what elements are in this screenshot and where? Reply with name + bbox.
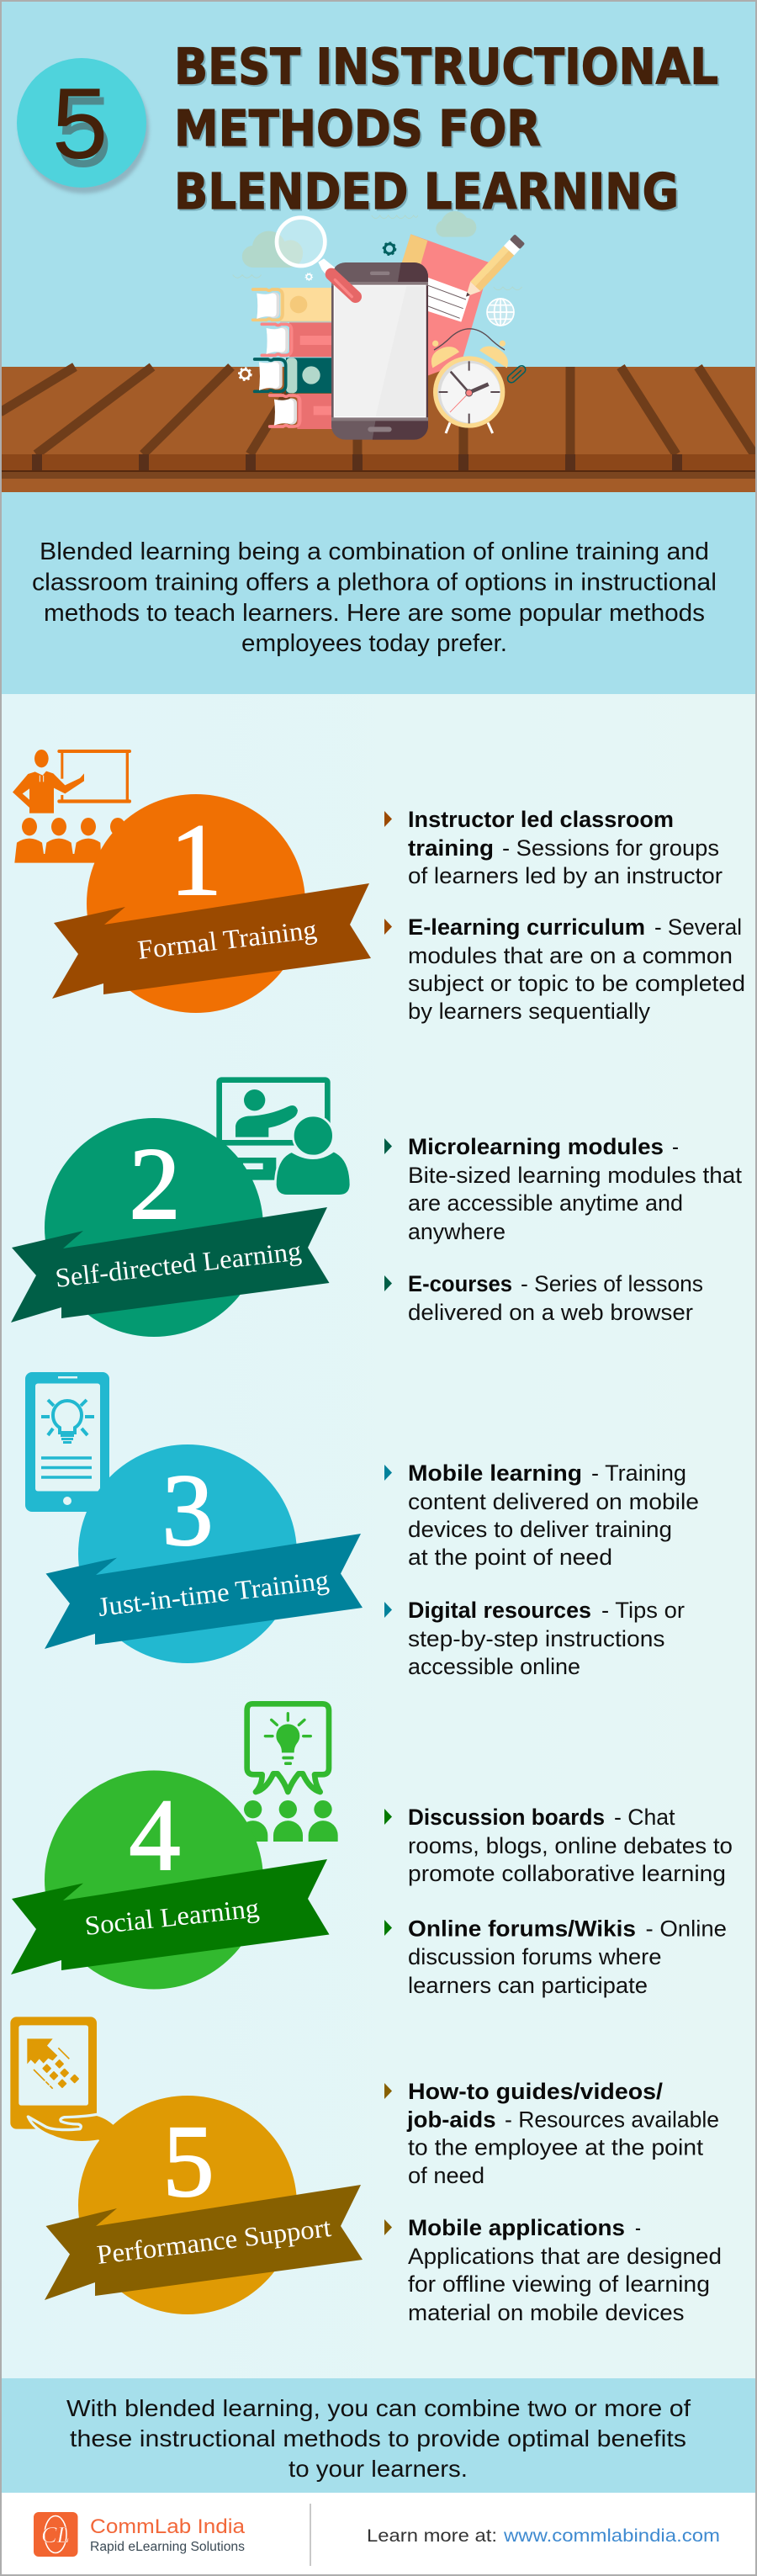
panel: closing statement: to your learners. [289,2456,468,2482]
bullets: formal training: - Sessions for groups [502,835,719,861]
panel: footer [0,2493,757,2576]
icon: alarm clock [431,329,508,433]
section 2: self-directed learning [11,1080,743,1337]
bullets: formal training [384,807,745,1024]
logo text: CommLab India [90,2515,246,2538]
bullets: self-directed learning: are accessible anytime and [408,1190,683,1216]
bullets: self-directed learning [384,1134,743,1325]
ribbon: just-in-time training [45,1534,363,1649]
logo mark: CL [41,2522,70,2547]
bullets: performance support [384,2079,722,2325]
bullets: just-in-time training: accessible online [408,1654,580,1679]
number circle 2 [45,1118,263,1337]
bullets: social learning: discussion forums where [408,1944,661,1969]
bullets: just-in-time training: at the point of need [408,1545,612,1570]
ribbon: social learning [11,1859,330,1974]
intro text: employees today prefer. [241,630,507,657]
bullets: self-directed learning: delivered on a web browser [408,1300,693,1325]
ribbon: formal training: Formal Training [136,914,318,965]
icon: magnifying glass [277,218,356,297]
learn more link: Learn more at: [367,2526,497,2546]
bullets: formal training: Instructor led classroom [408,807,674,832]
icon: clouds [242,211,476,268]
bullets: self-directed learning: anywhere [408,1219,506,1244]
bullets: social learning [384,1805,733,1998]
section 4: social learning [11,1704,733,1998]
number circle 3 [78,1444,297,1663]
number 2: 2 [130,1127,180,1241]
icon: presenter on screen [220,1080,351,1195]
intro text [32,538,717,657]
ribbon: self-directed learning: Self-directed Learning [54,1235,303,1293]
ribbon: social learning: Social Learning [83,1892,261,1941]
bullets: performance support: for offline viewing of learning [408,2271,710,2297]
number 4: 4 [130,1778,180,1892]
number badge [17,58,149,193]
icon: paper clip [506,364,527,384]
icon: instructor and audience [13,750,131,863]
bullets: self-directed learning: Microlearning modules [408,1134,664,1159]
intro text: classroom training offers a plethora of options in instructional [32,569,717,596]
bullets: self-directed learning: E-courses [408,1271,512,1296]
learn more link: www.commlabindia.com [503,2526,720,2546]
logo text: Rapid eLearning Solutions [90,2540,245,2554]
intro text: methods to teach learners. Here are some popular methods [44,600,705,627]
number circle 1 [87,794,305,1013]
number circle 4 [45,1770,263,1989]
logo text [90,2515,246,2554]
icon: book red lower [270,394,332,429]
logo mark [34,2512,77,2557]
ribbon: just-in-time training: Just-in-time Training [97,1565,331,1622]
bullets: social learning: learners can participate [408,1973,648,1998]
bullets: formal training: - Several [654,914,742,940]
icon: book red [262,322,332,357]
bullets: just-in-time training: - Training [591,1460,686,1486]
illustration: phone, books, clock [233,211,527,440]
icon: speech bubble with audience [238,1704,338,1842]
panel: closing statement [0,2378,757,2493]
number 5: 5 [163,2105,214,2218]
icon: book yellow [253,288,332,322]
bullets: social learning: rooms, blogs, online debates to [408,1833,733,1858]
bullets: just-in-time training: - Tips or [601,1598,685,1623]
bullets: just-in-time training [384,1460,699,1679]
icon: globe [487,299,514,326]
bullets: formal training: E-learning curriculum [408,914,645,940]
ribbon: performance support [45,2185,363,2300]
bullets: formal training: of learners led by an instructor [408,863,723,888]
bullets: performance support: - [635,2215,641,2240]
bullets: performance support: to the employee at the point [408,2135,704,2160]
number 3: 3 [161,1454,214,1567]
panel: header [0,0,757,694]
ribbon: performance support: Performance Support [95,2212,332,2270]
learn more link [367,2526,720,2546]
panel: closing statement: With blended learning, you can combine two or more of [66,2395,691,2421]
ribbon: self-directed learning [11,1207,330,1322]
icon: book green [255,358,332,393]
icon: mobile with light bulb [25,1372,109,1512]
bullets: just-in-time training: content delivered on mobile [408,1489,699,1514]
bullets: self-directed learning: - [672,1134,679,1159]
icon: squiggles [233,215,522,290]
bullets: performance support: of need [408,2163,484,2188]
bullets: self-directed learning: - Series of lessons [521,1271,703,1296]
bullets: self-directed learning: Bite-sized learning modules that [408,1163,743,1188]
title [174,37,718,220]
ribbon: formal training [52,883,371,999]
bullets: just-in-time training: Mobile learning [408,1460,582,1486]
bullets: performance support: material on mobile devices [408,2300,685,2325]
wood table [0,367,757,492]
bullets: just-in-time training: devices to deliver training [408,1517,672,1542]
panel: closing statement: these instructional methods to provide optimal benefits [70,2425,686,2451]
number badge: 5 [52,67,108,180]
bullets: performance support: - Resources available [505,2107,719,2132]
title: METHODS FOR [174,99,541,157]
icon: tablet on hand [10,2017,135,2154]
bullets: social learning: promote collaborative learning [408,1861,726,1886]
icon: red notebook [395,234,490,376]
number 1: 1 [170,803,222,917]
bullets: formal training: by learners sequentially [408,999,651,1024]
intro text: Blended learning being a combination of online training and [40,538,709,565]
bullets: social learning: - Chat [614,1805,675,1830]
bullets: social learning: Discussion boards [408,1805,605,1830]
bullets: performance support: Applications that are designed [408,2244,722,2269]
bullets: performance support: job-aids [406,2107,496,2132]
bullets: formal training: training [408,835,494,861]
icon: pencil [461,234,525,301]
bullets: just-in-time training: Digital resources [408,1598,591,1623]
icon: gears [239,242,395,380]
bullets: social learning: - Online [646,1916,727,1942]
bullets: performance support: How-to guides/videos/ [408,2079,664,2104]
bullets: social learning: Online forums/Wikis [408,1916,636,1942]
number circle 5 [78,2096,297,2314]
bullets: just-in-time training: step-by-step instructions [408,1626,664,1651]
bullets: formal training: subject or topic to be completed [408,971,745,996]
section 5: performance support [10,2017,722,2325]
title: BLENDED LEARNING [174,162,679,220]
icon: smartphone [331,262,429,440]
bullets: formal training: modules that are on a common [408,943,733,968]
section 3: just-in-time training [25,1372,699,1679]
section 1: formal training [13,750,745,1024]
panel: methods background [0,694,757,2378]
bullets: performance support: Mobile applications [408,2215,625,2240]
